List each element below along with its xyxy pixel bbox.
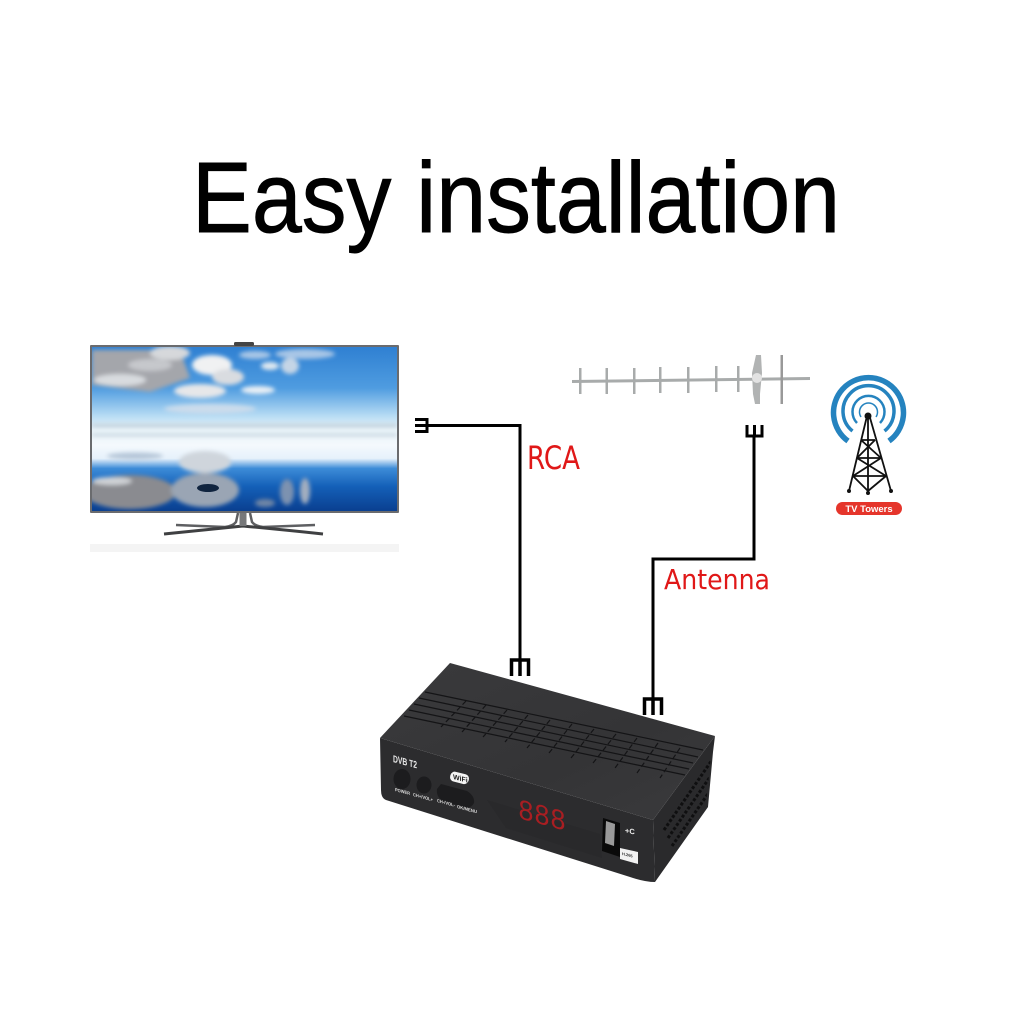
connector: antenna cable <box>644 425 762 715</box>
plug at receiver <box>644 699 662 715</box>
icon: television <box>84 342 399 552</box>
label: Antenna: Antenna <box>664 563 770 596</box>
USB port <box>602 818 620 857</box>
receiver box <box>380 663 715 882</box>
button labels <box>395 787 478 815</box>
side vent holes <box>663 760 710 847</box>
red LED digits: 888 <box>518 793 566 840</box>
display window <box>487 800 602 858</box>
button labels: CH-/VOL- <box>437 798 455 808</box>
box top face <box>380 663 715 820</box>
H.265 badge <box>620 848 638 864</box>
tv screen <box>84 346 397 511</box>
button labels: CH+/VOL+ <box>413 792 433 802</box>
tv frame <box>90 345 399 513</box>
box front face <box>380 738 655 882</box>
+C label: +C <box>625 826 635 836</box>
label: RCA: RCA <box>527 439 580 477</box>
plug at antenna <box>747 425 762 436</box>
box side face <box>653 736 715 882</box>
tv stand <box>164 513 323 534</box>
tower label: TV Towers <box>845 504 893 515</box>
plug at receiver <box>512 660 528 676</box>
title: Easy installation <box>192 142 840 254</box>
top vent slots <box>404 692 703 778</box>
power and channel buttons <box>394 769 474 808</box>
DVB logo: DVB T2 <box>393 754 417 771</box>
tower lattice <box>849 416 891 493</box>
button labels: OK/MENU <box>457 804 478 815</box>
plug at television <box>415 420 427 432</box>
Wi-Fi text: WiFi <box>453 773 468 785</box>
signal waves <box>834 378 904 441</box>
icon: yagi antenna <box>572 355 810 404</box>
tv reflection <box>90 544 399 552</box>
icon: TV tower <box>834 378 904 515</box>
button labels: POWER <box>395 787 411 796</box>
Wi-Fi badge <box>449 771 470 785</box>
tv webcam <box>234 342 254 346</box>
tower badge <box>836 502 902 515</box>
connector: RCA cable <box>415 420 528 676</box>
H.265 text: H.265 <box>622 851 633 859</box>
